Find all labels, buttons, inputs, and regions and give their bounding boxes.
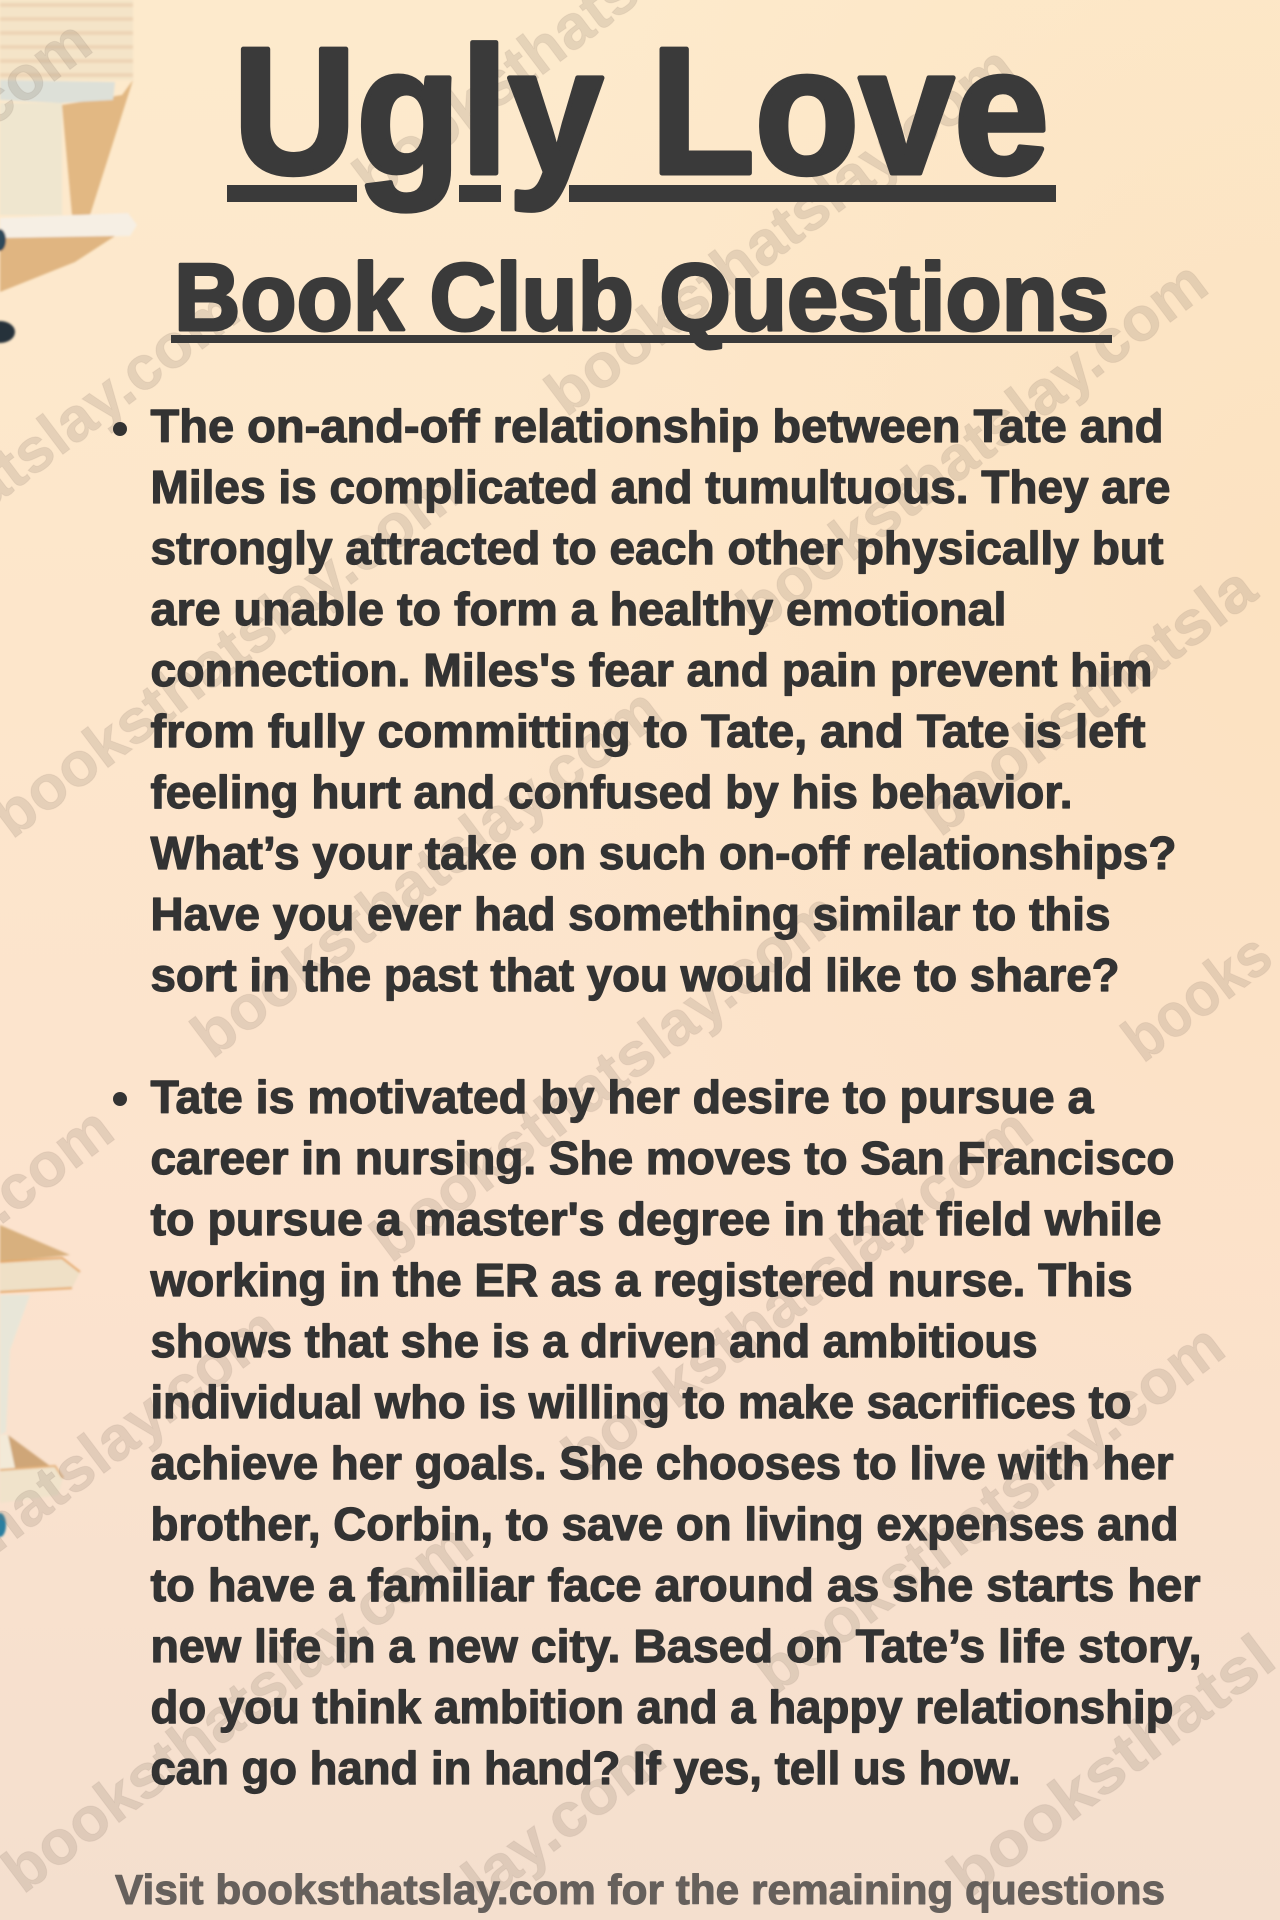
question 1: from fully committing to Tate, and Tate is left: [150, 705, 1146, 757]
title: Ugly Love: [233, 11, 1049, 212]
question 2: do you think ambition and a happy relationship: [150, 1681, 1174, 1733]
question 2: achieve her goals. She chooses to live with her: [150, 1437, 1174, 1489]
question 1: sort in the past that you would like to share?: [150, 949, 1120, 1001]
footer call to action: Visit booksthatslay.com for the remaining questions: [115, 1866, 1165, 1913]
watermarks: booksthatslay.com: [179, 674, 674, 1071]
question 1: [113, 400, 1176, 1001]
question 1: The on-and-off relationship between Tate and: [150, 400, 1164, 452]
question 2: career in nursing. She moves to San Francisco: [150, 1132, 1174, 1184]
question 2: individual who is willing to make sacrifices to: [150, 1376, 1132, 1428]
question 1: Have you ever had something similar to this: [150, 888, 1110, 940]
watermarks: lay.com: [450, 1720, 678, 1916]
question 2: to pursue a master's degree in that field while: [150, 1193, 1162, 1245]
subtitle: Book Club Questions: [174, 244, 1109, 351]
watermarks: booksthatsla: [907, 552, 1269, 849]
watermarks: booksthatslay.com: [0, 1509, 485, 1906]
question 1: feeling hurt and confused by his behavior.: [150, 766, 1072, 818]
watermarks: booksthatslay.com: [533, 32, 1028, 429]
question 1: are unable to form a healthy emotional: [150, 583, 1007, 635]
question 1: Miles is complicated and tumultuous. They are: [150, 461, 1170, 513]
image: stacked books lower left: [0, 1225, 80, 1537]
question 1: strongly attracted to each other physically but: [150, 522, 1164, 574]
question 2: shows that she is a driven and ambitious: [150, 1315, 1038, 1367]
watermarks: booksthatslay.com: [725, 247, 1220, 644]
watermarks: booksthatslay.com: [742, 1310, 1237, 1707]
question 2: Tate is motivated by her desire to pursue a: [150, 1071, 1094, 1123]
question 1: What’s your take on such on-off relationships?: [150, 827, 1176, 879]
question 1: connection. Miles's fear and pain prevent him: [150, 644, 1152, 696]
watermarks: booksthatslay.com: [550, 1094, 1045, 1491]
image: stacked books top left: [0, 0, 137, 343]
question 2: brother, Corbin, to save on living expenses and: [150, 1498, 1178, 1550]
question 2: new life in a new city. Based on Tate’s life story,: [150, 1620, 1202, 1672]
question 2: to have a familiar face around as she starts her: [150, 1559, 1201, 1611]
question 2: can go hand in hand? If yes, tell us how.: [150, 1742, 1020, 1794]
question 2: working in the ER as a registered nurse. This: [150, 1254, 1132, 1306]
watermarks: booksthatslay.com: [358, 878, 853, 1275]
question 2: [113, 1071, 1202, 1794]
watermarks: booksthatsl: [935, 1621, 1280, 1911]
